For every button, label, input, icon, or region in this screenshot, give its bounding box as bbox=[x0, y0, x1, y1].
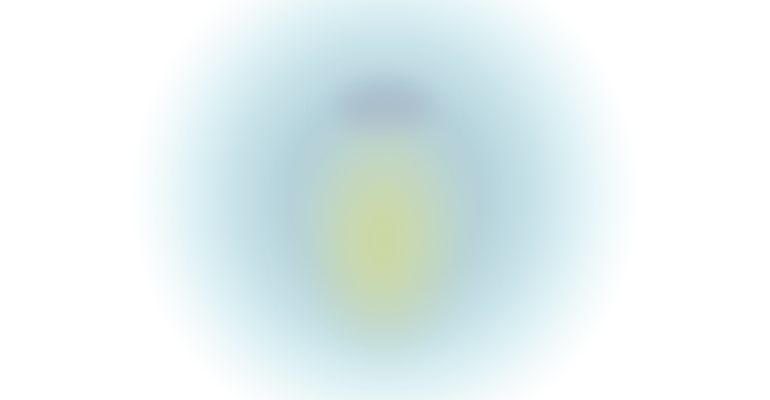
pale body glow bbox=[315, 130, 455, 340]
grey-blue upper shape bbox=[337, 84, 433, 136]
yellow-green centre bbox=[348, 180, 416, 300]
